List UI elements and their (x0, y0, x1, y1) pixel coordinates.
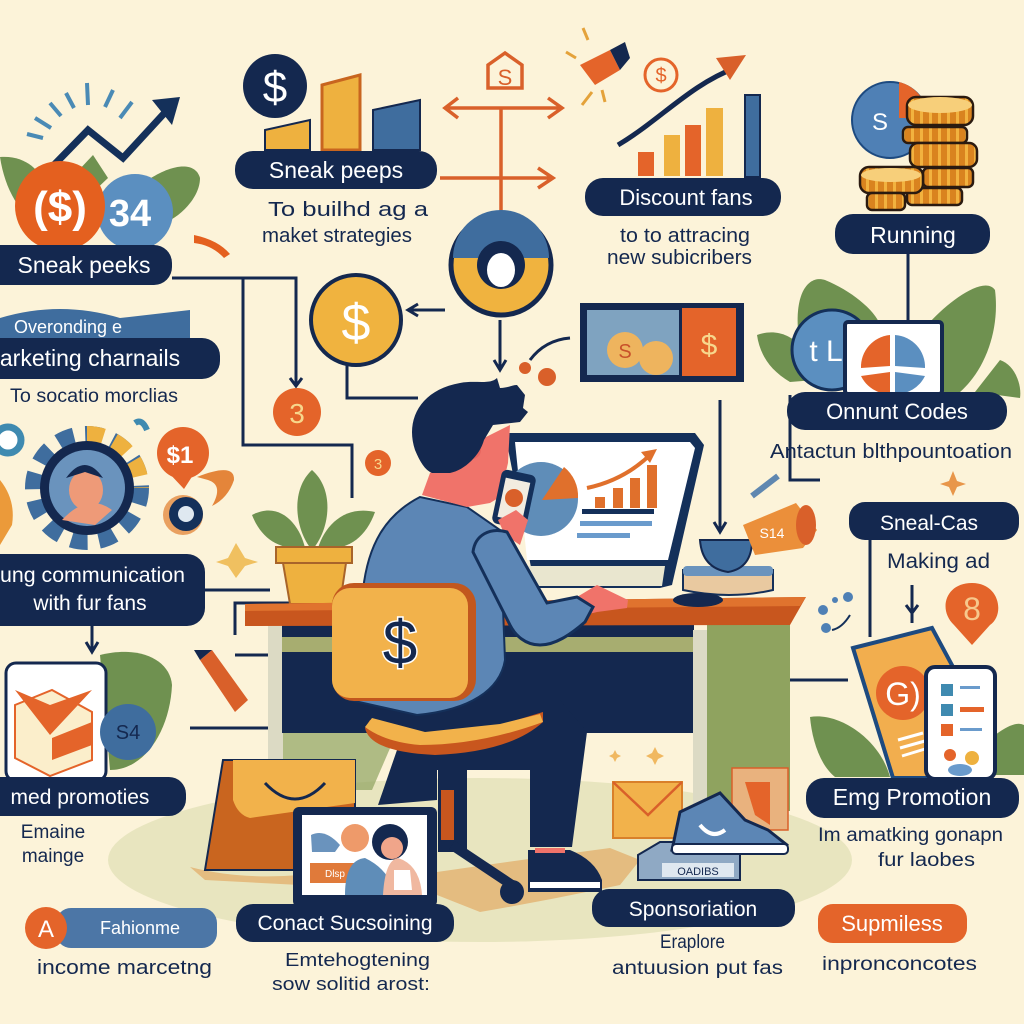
panel: overlapping marketing channels: Overonding e (14, 317, 122, 337)
label: contact sucsaining (236, 904, 454, 942)
label: emg promotion (806, 778, 1019, 818)
icon: chair with dollar: $ (383, 609, 417, 678)
icon: coins picture frame: $ (701, 329, 718, 362)
icon: growth arrow and coins top left: ($) (33, 183, 87, 232)
icon: cup and books on desk (673, 503, 817, 607)
label: supmiless (818, 904, 967, 943)
icon: monitor (504, 433, 704, 588)
icon: sneaker on box (638, 793, 788, 880)
icon: dollar and bars top: $ (263, 63, 287, 112)
icon: tablet with couple photo (293, 807, 437, 907)
text: emaine mainge: Emaine (21, 822, 85, 843)
icon: tiny orange badge: 3 (374, 456, 382, 473)
chart: rising bars with arrow (618, 55, 760, 177)
text: explore: antuusion put fas (612, 958, 783, 979)
label: sponsorsation (592, 889, 795, 927)
text: build a market strategies: maket strategies (262, 225, 412, 247)
icon: dollar coin with arrow (311, 275, 401, 365)
icon: sparkles near desk (609, 747, 664, 765)
icon: box and coin left: S4 (116, 722, 140, 744)
label: fahionme: A (38, 916, 54, 943)
icon: phones with leaves (810, 628, 1024, 779)
text: attracting new subscribers: to to attracing (620, 225, 750, 247)
label: sneal-cas: Sneal-Cas (880, 512, 978, 535)
text: marketing gonapn: fur laobes (878, 850, 975, 871)
icon: orange map pin (946, 583, 998, 645)
icon: small dollar coin: $ (655, 65, 667, 87)
text: entertaining solid (272, 950, 430, 994)
label: communication with fans: with fur fans (32, 592, 147, 615)
icon: coin stacks (852, 82, 977, 210)
icon: leaves behind pie chart right (757, 279, 1020, 398)
label: onnunt codes: Onnunt Codes (826, 399, 968, 424)
label: discount fans (585, 178, 781, 216)
icon: left edge fragments (0, 422, 147, 545)
icon: growth arrow and coins top left: 34 (109, 193, 151, 235)
label: sneak peeps: Sneak peeps (269, 157, 403, 183)
icon: tablet with couple photo: Dlsp (325, 869, 345, 880)
icon: coins picture frame (580, 303, 744, 382)
icon: cup and books on desk: S14 (760, 525, 785, 541)
icon: envelope (613, 782, 682, 838)
label: onnunt codes (787, 392, 1007, 430)
icon: small link (752, 476, 778, 496)
icon: tote bag (205, 760, 355, 870)
panel: overlapping marketing channels (0, 309, 220, 407)
icon: phones with leaves: G) (885, 676, 921, 712)
icon: dollar coin with arrow: $ (342, 294, 371, 352)
text: attracting new subscribers: new subicribers (607, 247, 752, 269)
text: making ad: Making ad (887, 550, 990, 573)
connector lines (86, 254, 918, 728)
text: inprononcontes: inpronconcotes (822, 954, 977, 975)
icon: box and coin left (6, 652, 172, 781)
text: entertaining solid: sow solitid arost: (272, 974, 430, 994)
icon: tag (732, 768, 788, 830)
icon: growth arrow and coins top left (0, 83, 230, 258)
label: sneal-cas (849, 502, 1019, 540)
icon: pencil (194, 650, 248, 712)
icon: coins picture frame: S (618, 341, 632, 363)
label: sponsorsation: Sponsoriation (629, 898, 757, 921)
diagram: orange cross arrows and house: S (498, 65, 512, 90)
panel: overlapping marketing channels: To socatio morclias (10, 386, 178, 407)
panel: overlapping marketing channels: arketing charnails (0, 345, 180, 371)
icon: dots (818, 592, 853, 633)
icon: small orange number badge: 3 (289, 398, 305, 429)
label: sneak peeks left (0, 245, 172, 285)
icon: dollar speech bubble: $1 (167, 442, 193, 469)
text: emaine mainge (21, 822, 85, 867)
icon: chair with dollar (332, 583, 543, 904)
icon: leaves behind pie chart right: t L (809, 335, 843, 368)
text: income marketing: income marcetng (37, 957, 212, 979)
text: explore (612, 932, 783, 979)
icon: person portrait circle (451, 210, 551, 315)
label: med promotions: med promoties (11, 786, 149, 809)
icon: small dollar coin (645, 59, 677, 91)
icon: orange map pin: 8 (963, 591, 981, 627)
desk (245, 597, 806, 811)
label: contact sucsaining: Conact Sucsoining (257, 912, 433, 935)
text: attracting new subscribers (607, 225, 752, 269)
label: communication with fans (0, 554, 205, 626)
icon: plant on desk (252, 470, 375, 604)
label: running (835, 214, 990, 254)
icon: person at desk (350, 378, 628, 892)
text: marketing gonapn: Im amatking gonapn (818, 825, 1003, 846)
icon: small orange number badge (273, 388, 321, 436)
icon: dollar and bars top (243, 54, 420, 150)
icon: tiny orange badge (365, 450, 391, 476)
label: supmiless: Supmiless (841, 911, 943, 936)
icon: sparkle (216, 543, 258, 578)
label: running: Running (870, 222, 956, 248)
label: emg promotion: Emg Promotion (833, 784, 991, 810)
icon: dollar speech bubble (157, 427, 234, 535)
label: sneak peeps (235, 151, 437, 189)
label: fahionme (25, 907, 217, 949)
icon: sparkle right (940, 471, 966, 496)
text: build a market strategies (262, 199, 429, 247)
text: emaine mainge: mainge (22, 846, 84, 867)
text: anctaction: Antactun blthpountoation (770, 441, 1012, 463)
icon: spotlight (566, 28, 630, 105)
label: sneak peeks left: Sneak peeks (18, 252, 150, 278)
label: discount fans: Discount fans (619, 185, 753, 210)
diagram: orange cross arrows and house (440, 53, 562, 215)
label: communication with fans: ung communication (0, 564, 185, 587)
label: fahionme: Fahionme (100, 918, 180, 938)
icon: cherry sprig arrow (519, 338, 570, 386)
icon: coin stacks: S (872, 109, 888, 136)
text: build a market strategies: To builhd ag a (268, 199, 429, 221)
text: entertaining solid: Emtehogtening (285, 950, 430, 970)
text: marketing gonapn (818, 825, 1003, 871)
icon: gear with person (35, 436, 139, 540)
icon: sneaker on box: OADIBS (677, 866, 719, 878)
label: med promotions (0, 777, 186, 816)
text: explore: Eraplore (660, 932, 725, 953)
